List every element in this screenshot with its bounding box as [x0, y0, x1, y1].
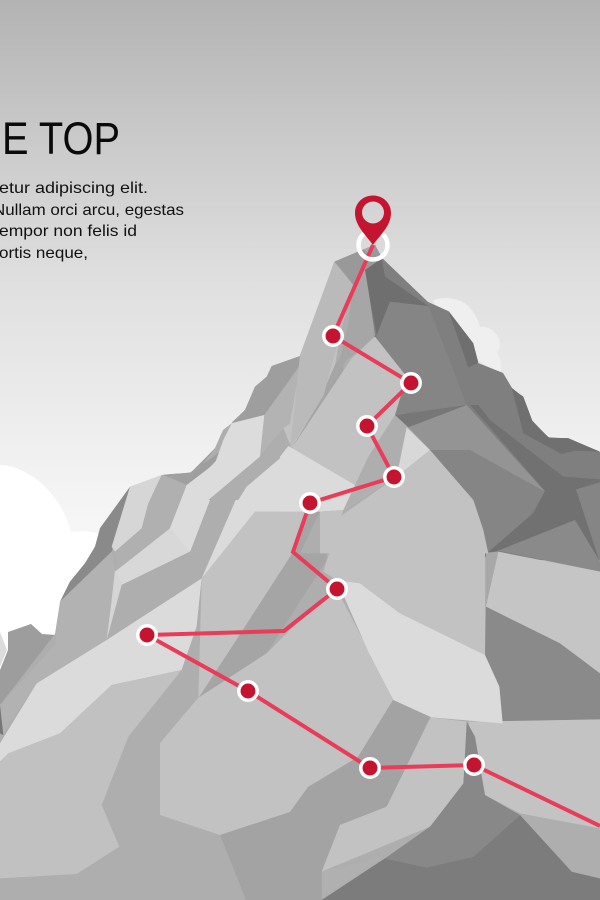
boulder: bottom centre	[160, 590, 393, 835]
left flank facets	[0, 447, 327, 878]
route waypoints	[138, 327, 483, 777]
distant left hills	[0, 624, 56, 705]
cloud: small right	[433, 298, 501, 375]
body text	[0, 180, 184, 262]
summit ring	[358, 230, 388, 260]
mountain silhouette	[0, 245, 600, 900]
right rock face	[365, 245, 600, 572]
shadow: bottom centre	[220, 700, 430, 900]
icon: location pin	[355, 196, 391, 245]
body text: ortis neque,	[0, 245, 88, 262]
body text: empor non felis id	[0, 223, 137, 240]
climbing route	[147, 245, 600, 826]
title: E TOP	[2, 113, 120, 164]
upper left ridge facets	[170, 337, 343, 552]
lower right rock panels	[322, 552, 600, 900]
mountain	[0, 245, 600, 900]
cloud: large left	[0, 465, 110, 700]
summit and central facets	[280, 245, 488, 553]
body text: etur adipiscing elit.	[0, 180, 148, 197]
lower centre boulders	[160, 530, 503, 900]
